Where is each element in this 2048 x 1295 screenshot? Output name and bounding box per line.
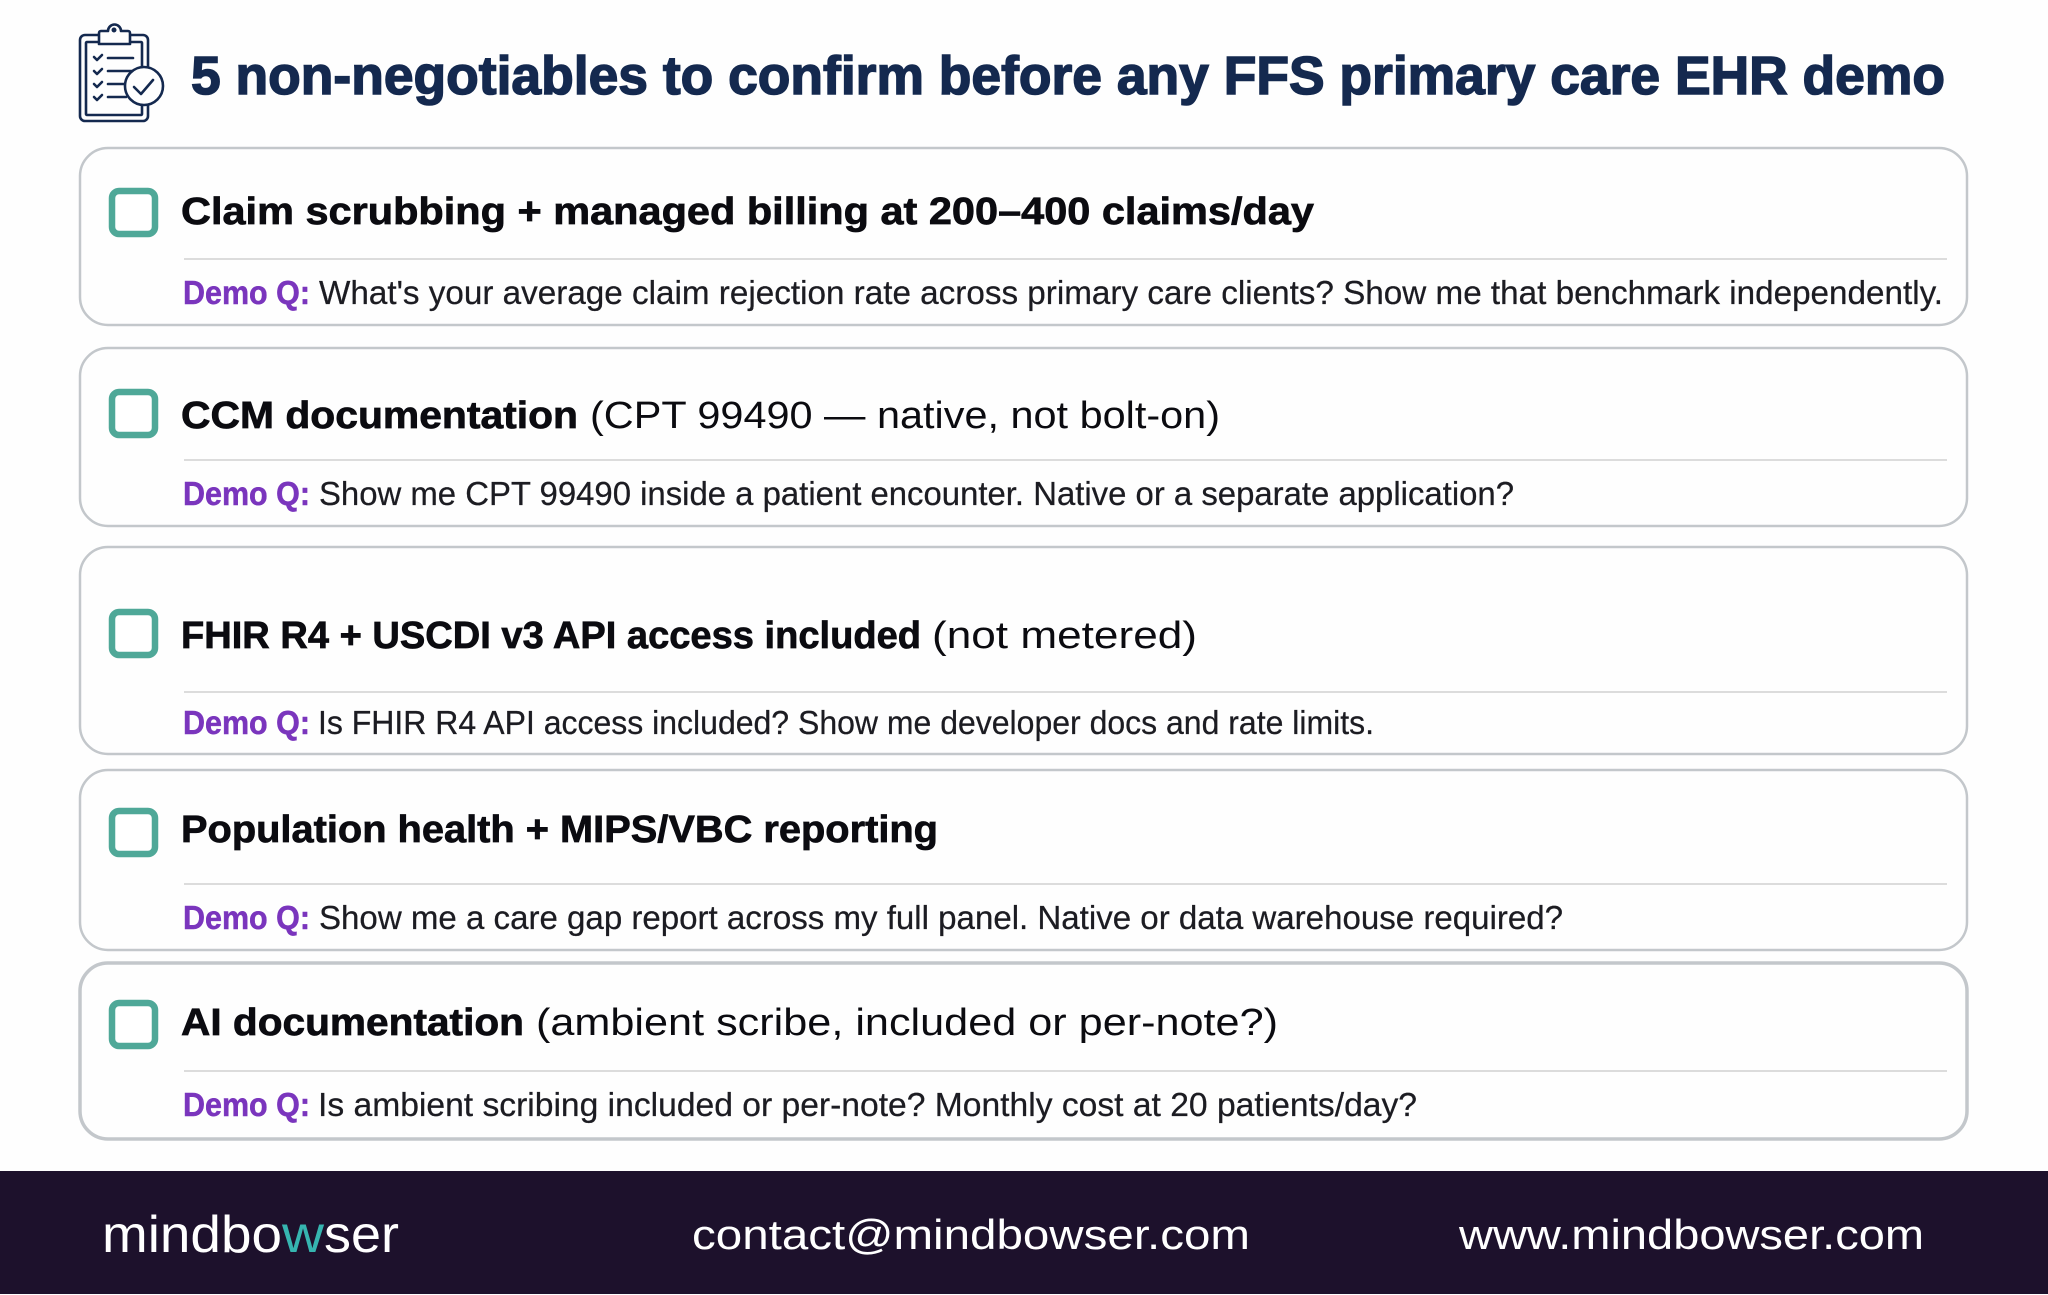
heading: FHIR API access: (not metered) <box>932 615 1197 657</box>
heading: claim scrubbing: Claim scrubbing + managed billing at 200–400 claims/day <box>181 191 1314 233</box>
heading: FHIR API access: FHIR R4 + USCDI v3 API access included <box>181 615 921 657</box>
logo: mindbowser: w <box>281 1206 324 1264</box>
panel: CCM documentation <box>80 348 1967 526</box>
heading: AI documentation: (ambient scribe, included or per-note?) <box>536 1002 1278 1044</box>
demo question: Demo Q: <box>183 1086 310 1123</box>
icon: checkbox <box>112 811 155 854</box>
demo question: Demo Q: <box>183 274 310 311</box>
footer band <box>0 1171 2048 1294</box>
demo question: Demo Q: <box>183 475 310 512</box>
icon: checkbox <box>112 392 155 435</box>
logo: mindbowser: mindbo <box>102 1206 282 1264</box>
heading: CCM documentation: (CPT 99490 — native, not bolt-on) <box>590 395 1220 437</box>
heading: CCM documentation: CCM documentation <box>181 395 578 437</box>
demo question: What's your average claim rejection rate across primary care clients? Show me that benchmark independently. <box>319 274 1943 311</box>
website: www.mindbowser.com <box>1458 1211 1924 1258</box>
demo question: Show me a care gap report across my full panel. Native or data warehouse required? <box>319 899 1563 936</box>
heading: AI documentation: AI documentation <box>181 1002 524 1044</box>
panel: population health <box>80 770 1967 950</box>
logo: mindbowser: ser <box>324 1206 399 1264</box>
title: 5 non-negotiables to confirm before any FFS primary care EHR demo <box>191 46 1945 106</box>
icon: checkbox <box>112 612 155 655</box>
demo question: Demo Q: <box>183 704 310 741</box>
icon: clipboard checklist <box>80 24 163 121</box>
panel: FHIR API access <box>80 547 1967 754</box>
demo question: Demo Q: <box>183 899 310 936</box>
demo question: Is ambient scribing included or per-note? Monthly cost at 20 patients/day? <box>318 1086 1417 1123</box>
demo question: Is FHIR R4 API access included? Show me developer docs and rate limits. <box>318 704 1374 741</box>
panel: claim scrubbing <box>80 148 1967 325</box>
contact email: contact@mindbowser.com <box>692 1211 1250 1258</box>
heading: population health: Population health + MIPS/VBC reporting <box>181 809 938 851</box>
demo question: Show me CPT 99490 inside a patient encounter. Native or a separate application? <box>319 475 1514 512</box>
panel: AI documentation <box>80 963 1967 1139</box>
icon: checkbox <box>112 1003 155 1046</box>
icon: checkbox <box>112 191 155 234</box>
